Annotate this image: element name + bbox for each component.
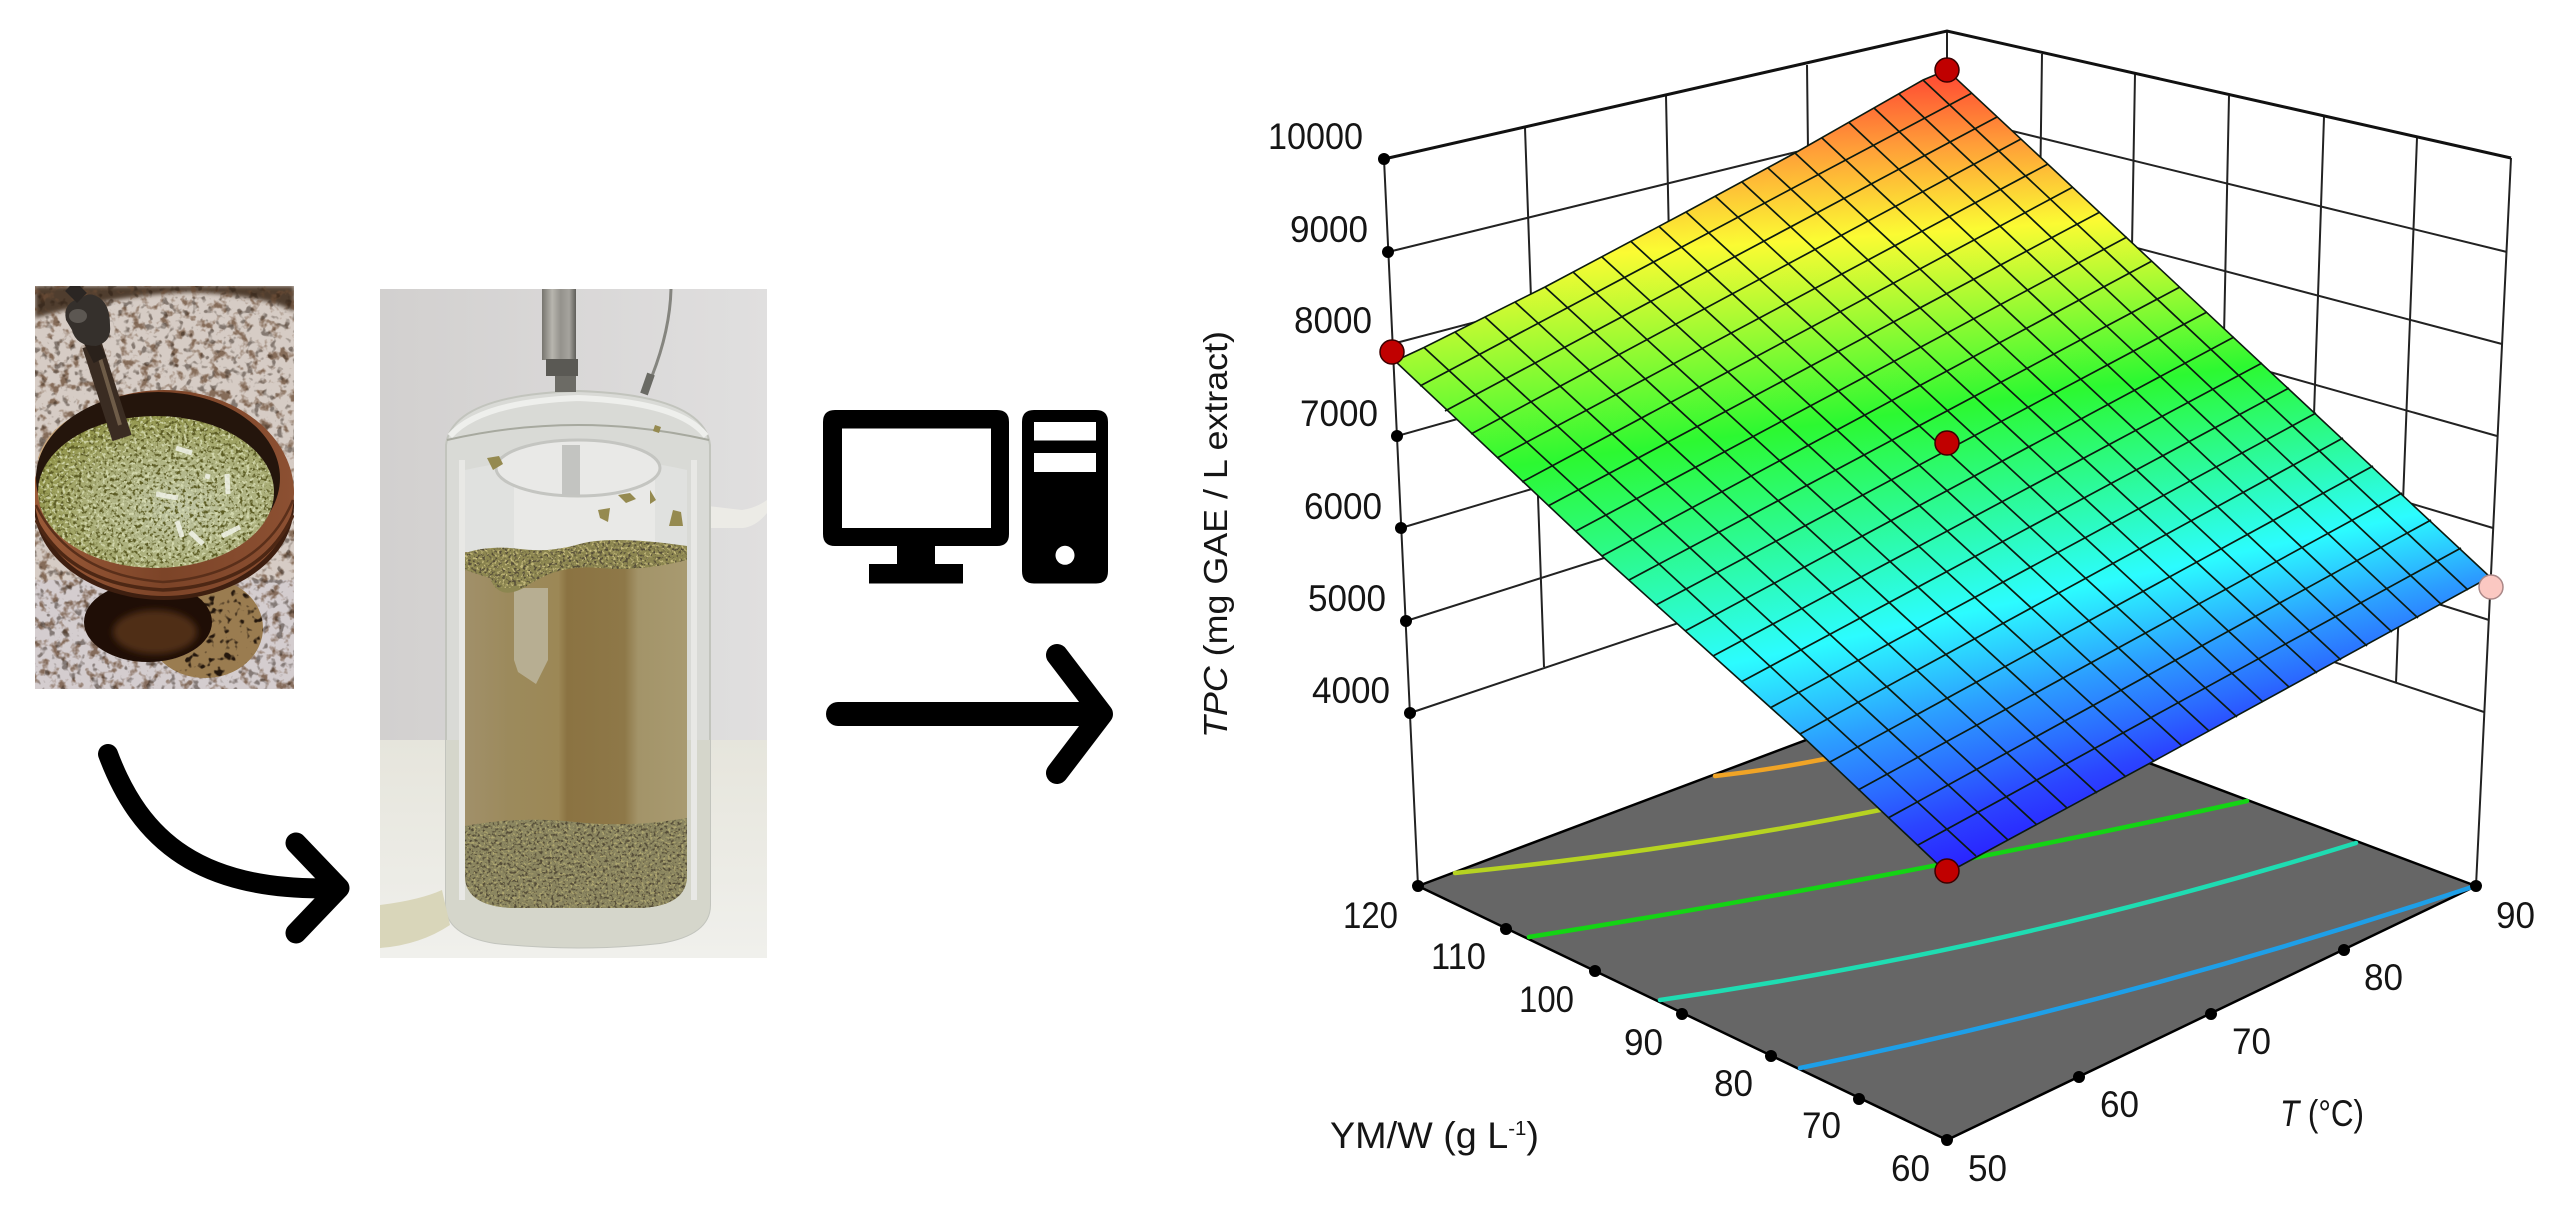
chart: TPC 3D response surface	[1197, 30, 2535, 1189]
YM/W axis tick labels: 100	[1519, 979, 1574, 1020]
axis title: YM/W: )	[1526, 1115, 1539, 1156]
YM/W axis tick labels: 120	[1343, 895, 1398, 936]
wall background	[380, 289, 767, 741]
floor plane	[1418, 687, 2476, 1140]
z axis tick labels	[1268, 116, 1390, 711]
yellow table blotch	[380, 890, 450, 948]
T axis tick labels: 70	[2232, 1021, 2271, 1062]
icon: monitor	[823, 410, 1009, 584]
axis title: T: T (°C)	[2280, 1093, 2364, 1134]
table surface	[380, 740, 767, 958]
YM/W axis tick labels: 80	[1714, 1063, 1753, 1104]
z axis tick labels: 10000	[1268, 116, 1363, 157]
floating herbs on liquid surface	[465, 540, 687, 593]
z axis tick labels: 6000	[1304, 486, 1382, 527]
T axis tick labels	[1968, 895, 2535, 1189]
jar glass body	[446, 391, 710, 948]
liquid	[465, 552, 687, 908]
photo: yerba mate gourd	[35, 286, 294, 689]
photo: jacketed glass extraction vessel	[380, 289, 767, 958]
axis title: TPC: TPC (mg GAE / L extract)	[1197, 331, 1234, 738]
z axis tick labels: 9000	[1290, 209, 1368, 250]
axis tick dots	[1378, 153, 2482, 1146]
YM/W axis tick labels: 110	[1431, 936, 1486, 977]
T axis tick labels: 90	[2496, 895, 2535, 936]
YM/W axis tick labels: 60	[1891, 1148, 1930, 1189]
YM/W axis tick labels: 70	[1802, 1105, 1841, 1146]
stirring shaft inside	[562, 445, 580, 495]
metal stirrer rod	[542, 289, 576, 360]
floor contour lines	[1455, 758, 2475, 1068]
YM/W axis tick labels	[1343, 895, 1930, 1189]
icon: desktop computer	[823, 410, 1108, 584]
sediment at bottom	[465, 818, 687, 908]
axis title: YM/W: -1	[1508, 1118, 1526, 1140]
arrow: curved from mate to vessel	[98, 744, 350, 944]
arrow: straight from vessel to model	[826, 644, 1113, 784]
z axis tick labels: 7000	[1300, 393, 1378, 434]
icon: tower	[1022, 410, 1108, 584]
response surface mesh	[1395, 70, 2490, 873]
z axis tick labels: 8000	[1294, 300, 1372, 341]
axis title: YM/W: YM/W (g L	[1330, 1115, 1505, 1156]
YM/W axis tick labels: 90	[1624, 1022, 1663, 1063]
z axis tick labels: 4000	[1312, 670, 1390, 711]
response surface colour fill	[1390, 65, 2495, 880]
inner glass and upper headspace	[465, 458, 687, 552]
probe wire	[652, 289, 671, 376]
z axis tick labels: 5000	[1308, 578, 1386, 619]
back walls grid	[1384, 31, 2511, 886]
design point markers	[1380, 58, 2503, 883]
side hose	[708, 500, 767, 528]
baffle reflection in liquid	[514, 588, 548, 684]
T axis tick labels: 50	[1968, 1148, 2007, 1189]
T axis tick labels: 80	[2364, 957, 2403, 998]
T axis tick labels: 60	[2100, 1084, 2139, 1125]
herb specks on glass	[487, 425, 683, 526]
